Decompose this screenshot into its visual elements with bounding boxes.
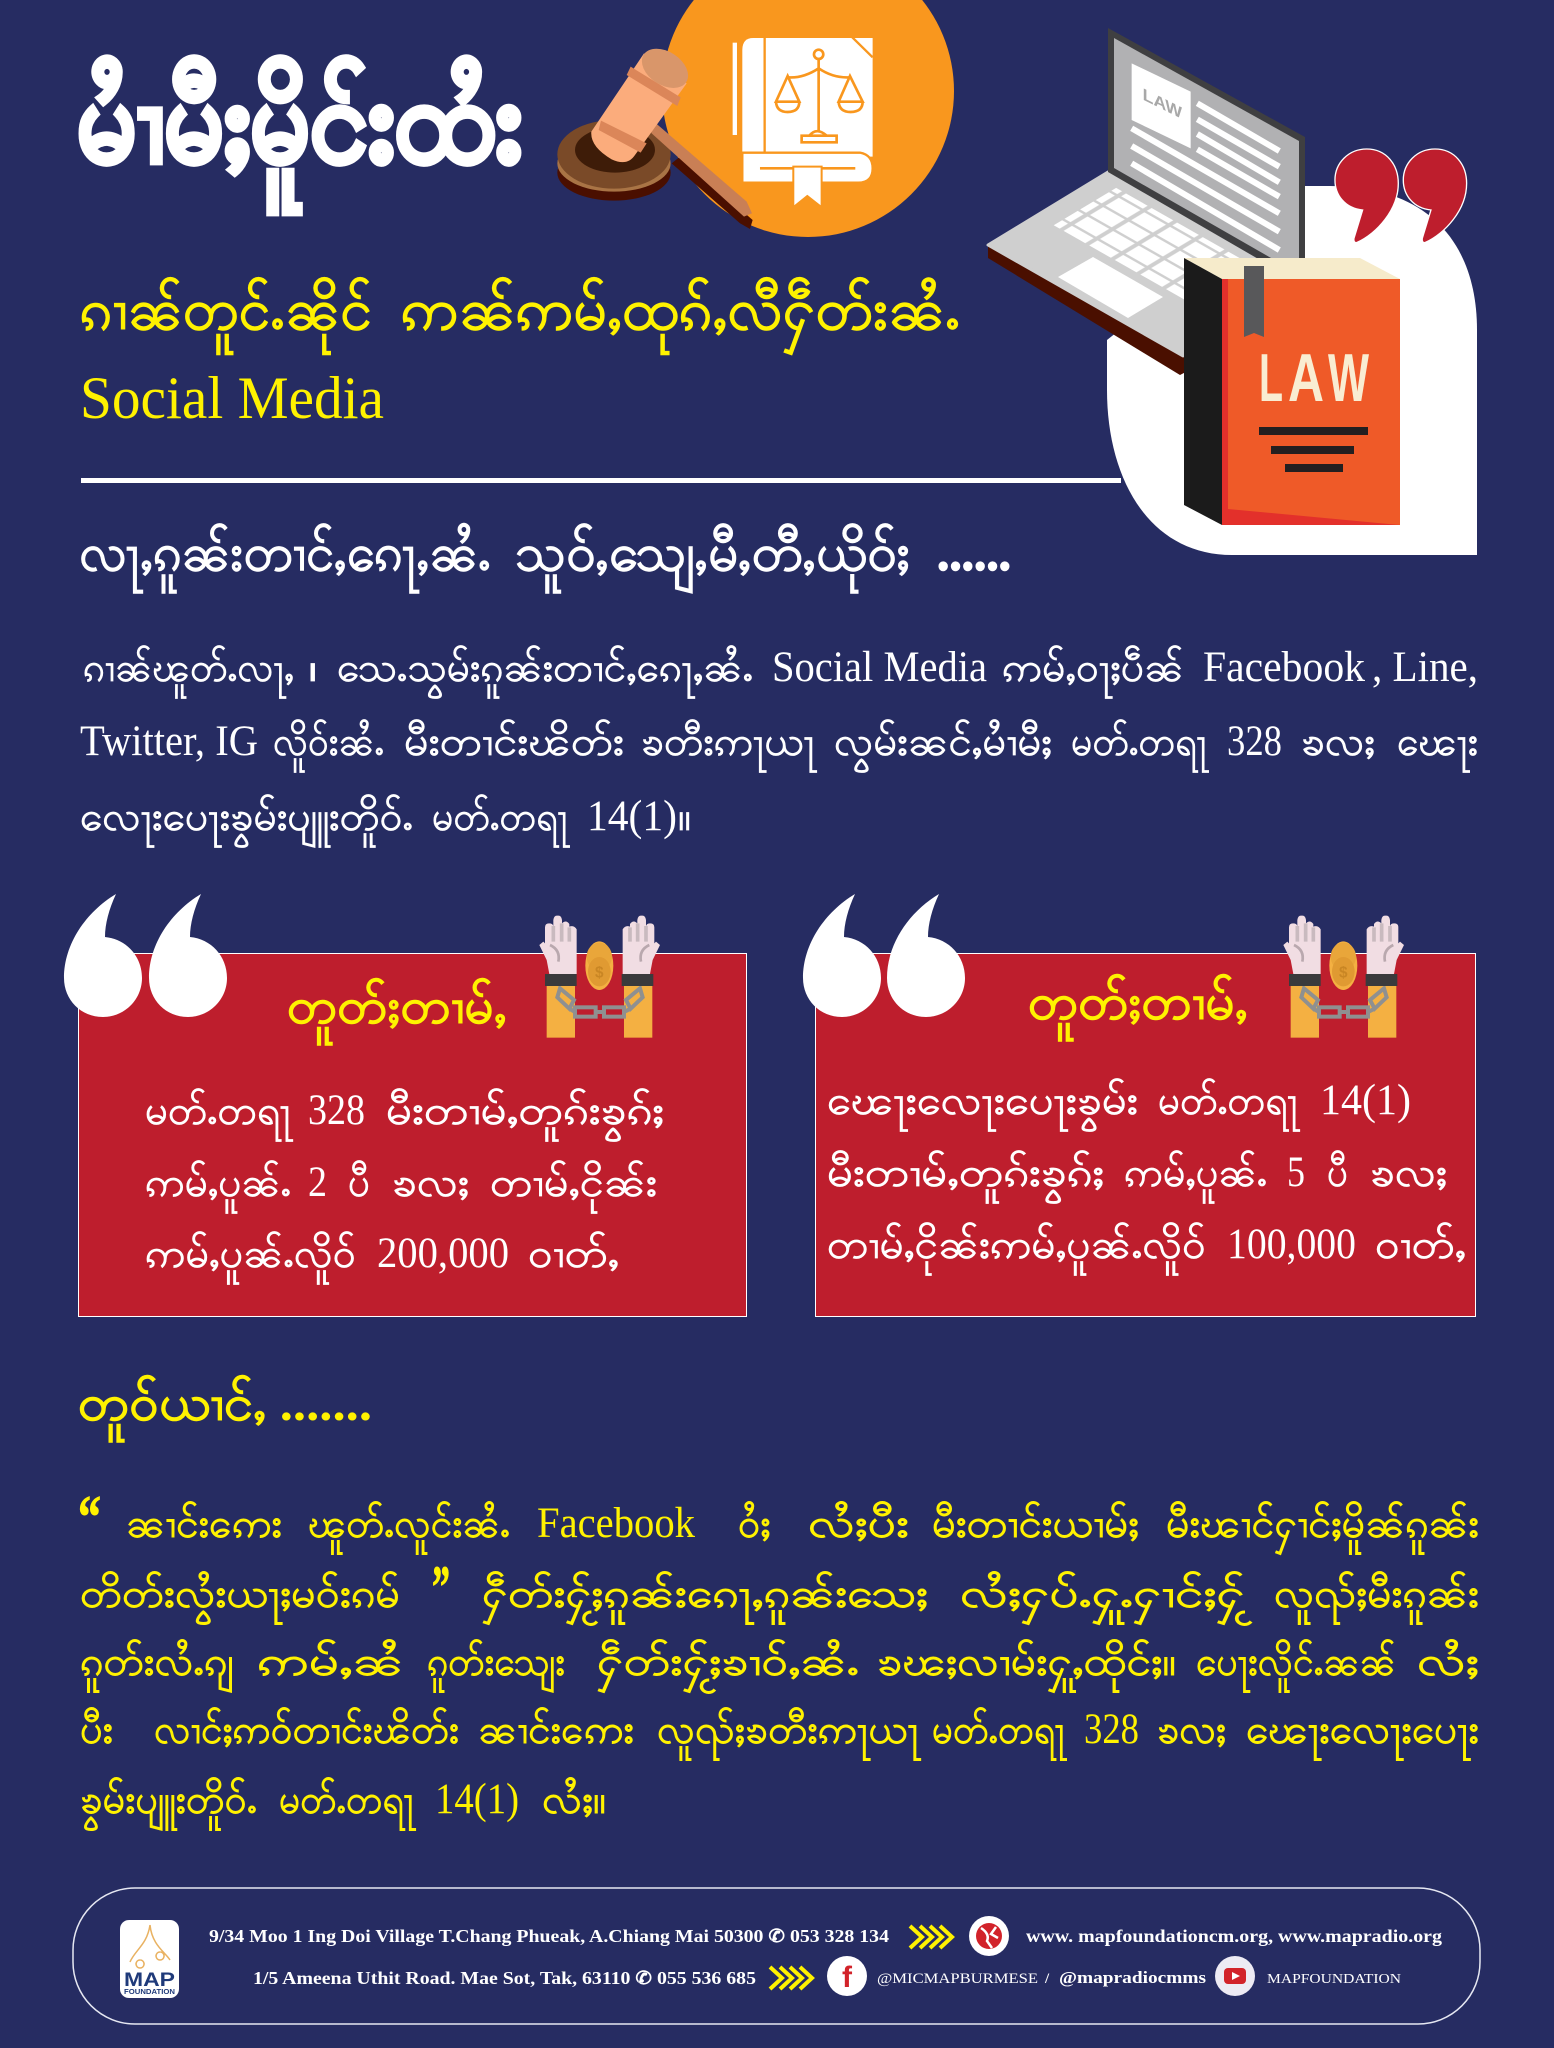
text block: intro paragraph: မတ်ႉတရႃ xyxy=(1071,719,1209,773)
text block: yellow example paragraph: ဝႆႈ xyxy=(738,1501,771,1546)
icon: chevrons xyxy=(770,1967,812,1989)
text block: yellow example paragraph: ပေႃးလိူင်ႉၼၼ် xyxy=(1196,1639,1396,1693)
icon: chevrons xyxy=(910,1926,952,1948)
text block: intro paragraph: သေႉသွမ်းၵူၼ်းတၢင်ႇၵေႃႇၼႆႉ xyxy=(337,645,753,699)
title: မၢႆမီႈမိူင်းထႆး xyxy=(77,56,522,214)
text block: yellow example paragraph: ၵူတ်းသျေး xyxy=(427,1639,565,1693)
text block: yellow example paragraph: တိတ်းလွႆးယႃႈမဝ်းၵမ် xyxy=(80,1571,400,1625)
icon: MAP foundation logo xyxy=(120,1920,179,1998)
text block: yellow example paragraph: လႆႈ xyxy=(1417,1639,1479,1684)
card text: 328 xyxy=(308,1087,365,1134)
panel: penalty card left xyxy=(64,894,746,1316)
card text: 5 xyxy=(1287,1149,1305,1196)
text block: intro paragraph: ဢမ်ႇဝႃႈပဵၼ် xyxy=(1002,645,1184,699)
card text: ဝၢတ်ႇ xyxy=(528,1231,619,1276)
text block: intro paragraph: 14(1) xyxy=(587,793,677,840)
card text: ဢမ်ႇပူၼ်ႉ xyxy=(1124,1150,1267,1204)
heading: white section title: ...... xyxy=(937,525,1011,582)
divider xyxy=(81,478,1121,483)
card heading: တူတ်ႈတၢမ်ႇ xyxy=(1028,972,1248,1043)
card text xyxy=(145,1087,664,1285)
subtitle: Social Media: Social Media xyxy=(80,365,384,431)
text block: intro paragraph: Social Media xyxy=(772,644,987,691)
card text: မတ်ႉတရႃ xyxy=(1158,1078,1300,1132)
icon: law book: A xyxy=(1288,340,1324,416)
icon: red closing quote mark xyxy=(1335,149,1467,243)
text block: yellow example paragraph: ၶွမ်းပျူးတိူဝ်ႉ xyxy=(80,1777,257,1831)
text block: intro paragraph: လွမ်းၼင်ႇမၢႆမီႈ xyxy=(834,719,1052,773)
card text: မီးတၢမ်ႇတူၵ်းၶွၵ်ႈ xyxy=(386,1088,664,1142)
social handles xyxy=(877,1968,1206,1987)
text block: yellow example paragraph: Facebook xyxy=(537,1500,695,1547)
card text: ပီ xyxy=(1327,1150,1348,1195)
text block: yellow example paragraph: ႁဵတ်းႁႂ်ႈၵူၼ်းၵေႃႇၵူၼ်းသေႈ xyxy=(482,1571,928,1626)
text block: intro paragraph: ။ xyxy=(678,794,691,839)
text block: yellow example paragraph: 328 xyxy=(1084,1706,1139,1753)
text block: yellow example paragraph: ၶၽႈလၢမ်းႁူႇထိုင်ႈ။ xyxy=(877,1639,1176,1694)
icon: law book: W xyxy=(1328,340,1370,416)
text block: yellow example paragraph: ၶလႈ xyxy=(1157,1707,1226,1752)
text block: yellow example paragraph: ၼၢင်းဢေး xyxy=(126,1501,282,1546)
card text: တၢမ်ႇငိုၼ်း xyxy=(490,1160,657,1214)
icon: globe xyxy=(969,1916,1009,1956)
text block: yellow example paragraph: ဢမ်ႇၼႆ xyxy=(257,1639,404,1684)
subtitle xyxy=(80,277,960,355)
icon: orange circle with law book xyxy=(662,0,954,237)
text block: yellow example paragraph: မီးၽၢင်ႁၢင်ႈမိူၼ်ၵူၼ်း xyxy=(1166,1501,1479,1556)
subtitle: ဢၼ်ဢမ်ႇထုၵ်ႇလီႁဵတ်းၼႆႉ xyxy=(401,277,960,355)
card text: ဝၢတ်ႇ xyxy=(1375,1222,1466,1267)
social handles: @mapradiocmms xyxy=(1059,1968,1206,1987)
text block: yellow example paragraph xyxy=(78,1484,1479,1831)
text block: intro paragraph: ၵၢၼ်ၽူတ်ႉလႃႇ xyxy=(83,645,294,699)
text block: yellow example paragraph: ၵူတ်းလႆႉၵျ xyxy=(80,1639,234,1693)
panel: white backing shape xyxy=(1107,186,1477,555)
card text: ၽေႃးလေႃးပေႃးၶွမ်း xyxy=(827,1078,1138,1132)
text block: yellow example paragraph: လႆႈ။ xyxy=(542,1777,606,1822)
card text: ဢမ်ႇပူၼ်ႉလိူဝ် xyxy=(145,1231,356,1285)
text block: intro paragraph: လိူဝ်းၼႆႉ xyxy=(273,719,384,773)
card text: 2 xyxy=(308,1159,327,1206)
icon: law book xyxy=(1184,258,1400,525)
card text xyxy=(827,1077,1466,1276)
text block: intro paragraph: Facebook xyxy=(1203,644,1365,691)
text block: yellow example paragraph: လူၺ်ႈမီးၵူၼ်း xyxy=(1274,1571,1479,1625)
icon: handcuffs with coins xyxy=(539,916,660,1038)
icon: MAP foundation logo: MAP xyxy=(124,1970,175,1991)
card text: တၢမ်ႇငိုၼ်းဢမ်ႇပူၼ်ႉလိူဝ် xyxy=(827,1222,1206,1276)
card text: ၶလႈ xyxy=(392,1160,469,1205)
text block: intro paragraph: , Line, xyxy=(1372,644,1478,691)
text block: intro paragraph: လေႃးပေႃးၶွမ်းပျူးတိူဝ်ႉ xyxy=(80,794,413,848)
subtitle: ၵၢၼ်တူင်ႉၼိုင် xyxy=(80,277,372,354)
icon: handcuffs with coins xyxy=(1283,916,1404,1038)
card text: 100,000 xyxy=(1227,1221,1356,1268)
card text: ၶလႈ xyxy=(1370,1150,1447,1195)
text block: yellow example paragraph: မတ်ႉတရႃ xyxy=(279,1777,416,1831)
panel: footer contact xyxy=(73,1888,1480,2024)
card text: 200,000 xyxy=(377,1230,509,1277)
icon: right white quote xyxy=(803,894,965,1017)
text block: yellow example paragraph: ” xyxy=(432,1554,450,1620)
panel: penalty card right xyxy=(803,894,1476,1316)
text block: intro paragraph xyxy=(80,644,1478,848)
card heading: တူတ်ႈတၢမ်ႇ xyxy=(287,976,507,1047)
card text: 14(1) xyxy=(1320,1077,1411,1124)
text block: intro paragraph: Twitter, IG xyxy=(80,718,258,765)
icon: facebook xyxy=(827,1956,867,1996)
card text: မတ်ႉတရႃ xyxy=(145,1088,293,1142)
address line 2: 1/5 Ameena Uthit Road. Mae Sot, Tak, 63110 ✆ 055 536 685 xyxy=(253,1968,756,1988)
text block: yellow example paragraph: ပီး xyxy=(80,1707,113,1752)
text block: intro paragraph: မတ်ႉတရႃ xyxy=(432,794,570,848)
icon: judge gavel xyxy=(557,41,753,229)
text block: intro paragraph: 328 xyxy=(1227,718,1282,765)
icon: youtube xyxy=(1215,1956,1255,1996)
social handles: @MICMAPBURMESE xyxy=(877,1971,1038,1987)
card text: ဢမ်ႇပူၼ်ႉ xyxy=(145,1160,291,1214)
address line 1: 9/34 Moo 1 Ing Doi Village T.Chang Phueak, A.Chiang Mai 50300 ✆ 053 328 134 xyxy=(209,1926,889,1946)
social handles: / xyxy=(1044,1971,1050,1987)
text block: yellow example paragraph: မတ်ႉတရႃ xyxy=(932,1707,1067,1761)
website text: www. mapfoundationcm.org, www.mapradio.org xyxy=(1026,1926,1442,1946)
text block: intro paragraph: မီးတၢင်းၽိတ်း xyxy=(404,719,624,764)
text block: yellow example paragraph: ၽူတ်ႉလူင်းၼႆႉ xyxy=(308,1501,510,1555)
text block: yellow example paragraph: ႁဵတ်းႁႂ်ႈၶၢဝ်ႇၼႆႉ xyxy=(597,1639,859,1694)
text block: yellow example paragraph: ၽေႃးလေႃးပေႃး xyxy=(1246,1707,1479,1761)
icon: facebook: f xyxy=(842,1961,853,1994)
text block: intro paragraph: ၶလႈ xyxy=(1301,719,1375,764)
icon: left white quote xyxy=(64,894,227,1017)
icon: MAP foundation logo: FOUNDATION xyxy=(124,1989,175,1996)
heading: white section title: လႃႇၵူၼ်းတၢင်ႇၵေႃႇၼႆႉ xyxy=(79,524,491,593)
icon: laptop xyxy=(988,28,1305,375)
card text: မီးတၢမ်ႇတူၵ်းၶွၵ်ႈ xyxy=(827,1150,1104,1204)
icon: law book: L xyxy=(1259,340,1283,416)
text block: yellow example paragraph: လၢင်ႈဢဝ်တၢင်းၽိတ်း xyxy=(154,1707,459,1752)
text block: yellow example paragraph: 14(1) xyxy=(435,1776,519,1823)
icon: laptop: LAW xyxy=(1143,84,1182,123)
heading: white section title xyxy=(79,524,1011,593)
text block: yellow example paragraph: “ xyxy=(78,1484,101,1550)
text block: yellow example paragraph: မီးတၢင်းယၢမ်ႈ xyxy=(932,1501,1139,1546)
text block: yellow example paragraph: လူၺ်ႈၶတီးဢႃယႃ xyxy=(657,1707,921,1761)
text block: yellow example paragraph: လႆႈႁပ်ႉႁူႉႁၢင်ႈႁႂ် xyxy=(960,1571,1252,1626)
channel name: MAPFOUNDATION xyxy=(1267,1972,1401,1987)
text block: yellow example paragraph: ၼၢင်းဢေး xyxy=(478,1707,634,1752)
text block: intro paragraph: ၶတီးဢႃယႃ xyxy=(641,719,817,773)
card text: ပီ xyxy=(348,1160,370,1205)
heading: white section title: သူဝ်ႇသျေႇမီႇတီႇယိုဝ်ႈ xyxy=(515,524,910,593)
text block: intro paragraph: ၊ xyxy=(308,645,318,690)
text block: yellow example paragraph: လႆႈပီး xyxy=(808,1501,909,1546)
text block: intro paragraph: ၽေႃး xyxy=(1397,719,1478,773)
heading: yellow example: တူဝ်ယၢင်ႇ ....... xyxy=(78,1373,372,1444)
